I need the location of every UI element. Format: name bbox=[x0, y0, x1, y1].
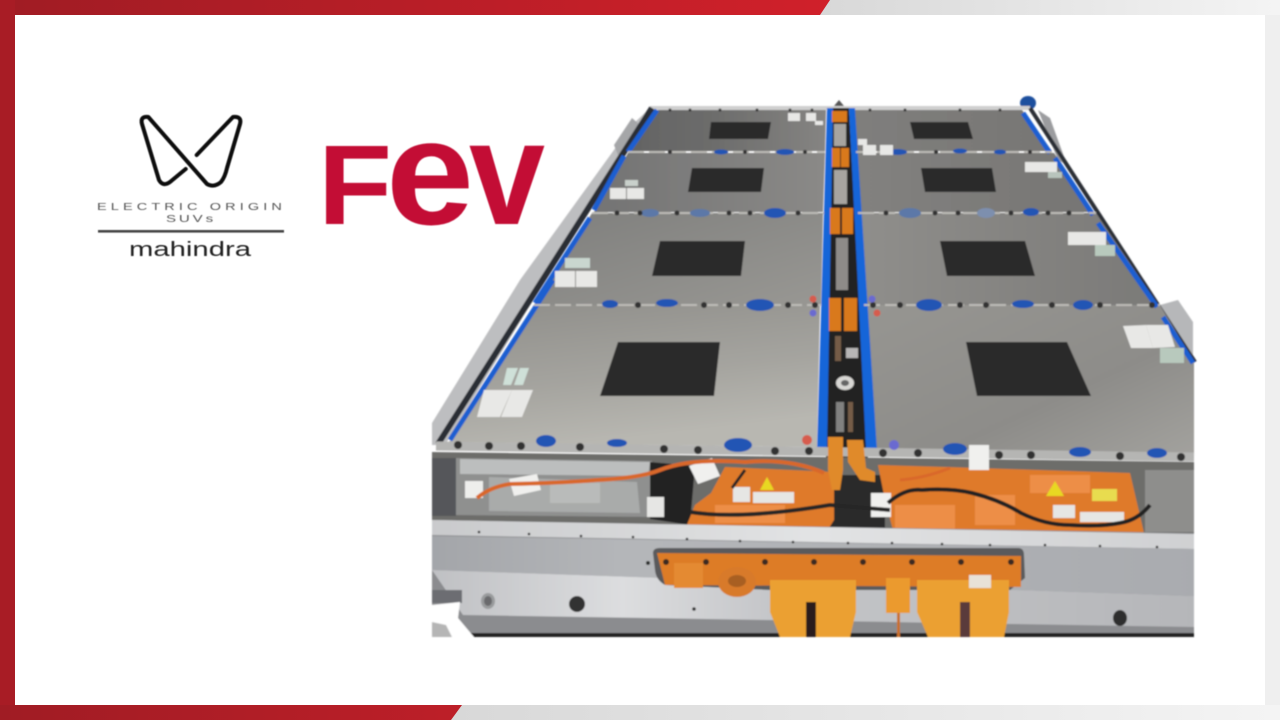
red and blue marks bbox=[802, 296, 899, 450]
blue outer edge strips bbox=[450, 110, 1193, 440]
frame: right bar bbox=[1265, 15, 1280, 720]
panels: top right row bbox=[853, 110, 1052, 151]
tagline: SUVs: SUVs bbox=[166, 213, 216, 225]
logo: FEV bbox=[318, 88, 545, 256]
logo: FEV: F bbox=[318, 122, 392, 248]
frame: top bar bbox=[0, 0, 1280, 15]
orange modules bbox=[686, 465, 1144, 533]
central channel bbox=[817, 108, 877, 460]
black pads bbox=[600, 122, 1091, 396]
panels: second right row bbox=[856, 153, 1094, 212]
clips on seams bbox=[536, 148, 1167, 458]
warning labels bbox=[465, 445, 1124, 522]
panels: third right row bbox=[860, 213, 1158, 305]
tagline: ELECTRIC ORIGIN bbox=[97, 201, 286, 213]
panels: second left row bbox=[594, 153, 825, 212]
logo: FEV: v bbox=[469, 91, 545, 256]
icon: Mahindra wing mark bbox=[142, 117, 240, 186]
panels: top left row bbox=[630, 110, 826, 151]
seam rails bbox=[534, 152, 1160, 305]
orange connector block bbox=[653, 548, 1025, 637]
lower compartment bbox=[432, 452, 1194, 536]
white labels on panels bbox=[477, 113, 1184, 417]
frame: bottom bar bbox=[0, 705, 1280, 720]
bolts on seams bbox=[454, 108, 1185, 461]
panels: bottom right row bbox=[866, 305, 1194, 458]
logo: Mahindra Electric Origin SUVs bbox=[97, 117, 286, 261]
panels: bottom left row bbox=[449, 305, 820, 447]
frame: left bar bbox=[0, 0, 15, 720]
cables bbox=[477, 461, 1150, 526]
logo: FEV: e bbox=[386, 88, 474, 256]
panels: third left row bbox=[536, 213, 823, 305]
wordmark: mahindra: mahindra bbox=[129, 239, 252, 261]
image: battery pack photo bbox=[432, 96, 1195, 637]
silver beam bbox=[432, 520, 1194, 637]
rail bolts bbox=[478, 531, 1158, 611]
orange bus bars bbox=[828, 437, 875, 490]
pack outer silver edges bbox=[432, 96, 1195, 445]
